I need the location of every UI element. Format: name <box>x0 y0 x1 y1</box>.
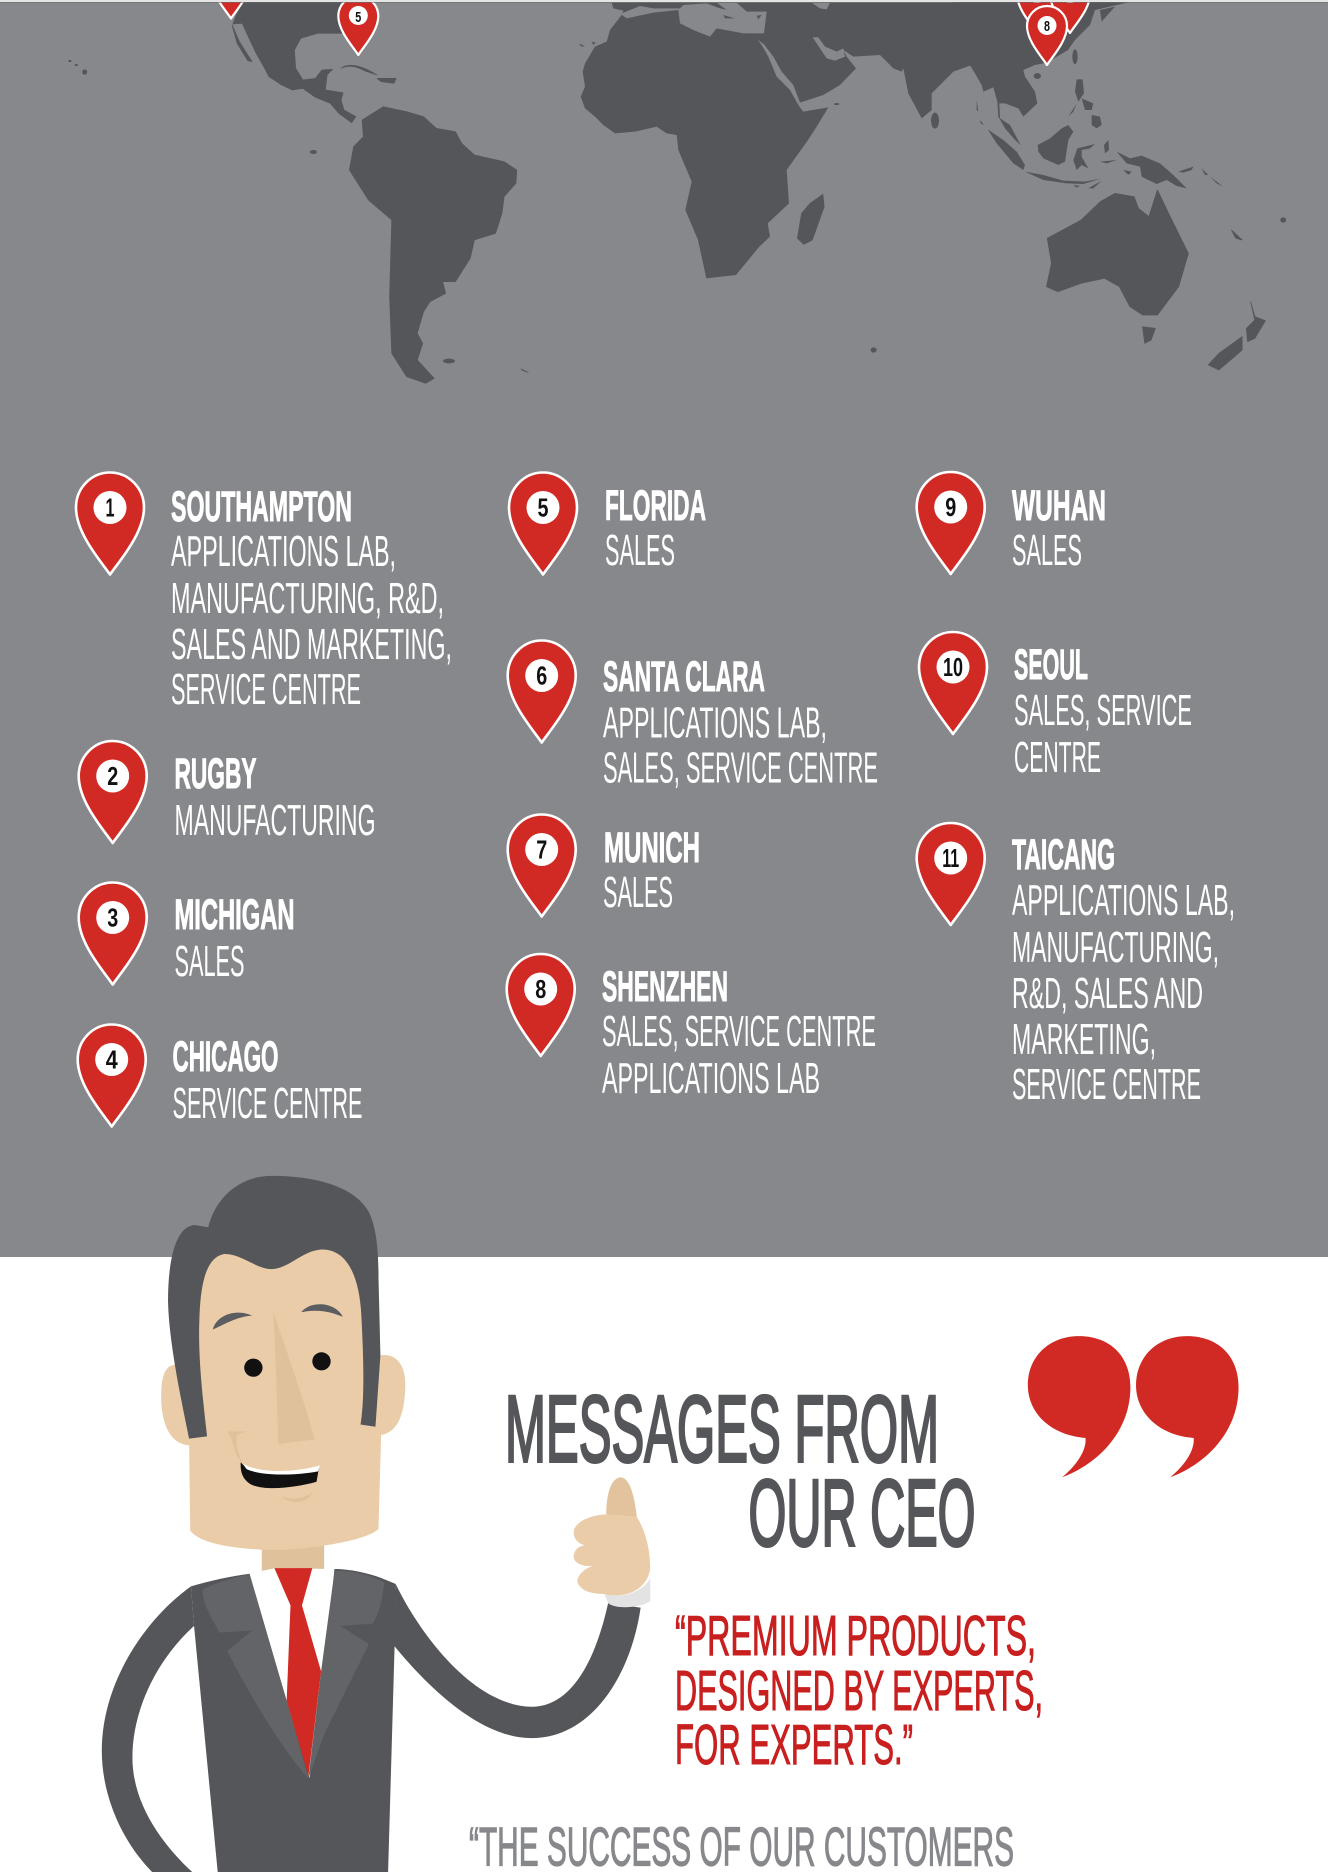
text: Munich: SALES <box>603 869 673 917</box>
map: East and Southeast Asia <box>953 2 1223 188</box>
map pin behind left <box>1017 0 1057 33</box>
text: Santa Clara: SANTA CLARA <box>603 653 765 701</box>
red pull quote <box>675 1604 1043 1777</box>
lapels <box>202 1571 384 1778</box>
text: Southampton: MANUFACTURING, R&D, <box>171 575 444 623</box>
text: Southampton: SOUTHAMPTON <box>171 483 352 531</box>
map pin: Chicago area <box>211 0 251 18</box>
pin 2: 2 <box>107 761 118 791</box>
text: Michigan: SALES <box>174 938 244 986</box>
text: Florida: FLORIDA <box>605 482 706 530</box>
eyebrows <box>213 1304 343 1330</box>
ears <box>161 1355 405 1445</box>
pin 1: 1 <box>106 492 114 522</box>
heading: messages from our CEO <box>505 1376 976 1566</box>
pin 6 <box>508 640 576 742</box>
thumbs-up hand <box>574 1477 650 1595</box>
location 1: Southampton <box>76 472 452 714</box>
icon: large quotation marks <box>1028 1336 1239 1477</box>
Mediterranean Sea <box>621 3 767 37</box>
text: Florida <box>605 482 706 575</box>
shirt <box>250 1568 334 1778</box>
pin 8 <box>507 954 575 1056</box>
pin 7: 7 <box>536 834 547 864</box>
text: Taicang <box>1012 831 1235 1109</box>
text: Taicang: TAICANG <box>1012 831 1115 879</box>
neck <box>262 1544 324 1571</box>
map pin 5: Florida: 5 <box>355 9 361 26</box>
text: Seoul <box>1014 641 1192 782</box>
pin 6: 6 <box>536 660 547 690</box>
text: Shenzhen <box>602 963 876 1103</box>
pin 4: 4 <box>106 1044 118 1074</box>
pin 5: 5 <box>538 492 548 522</box>
text: Munich: MUNICH <box>604 824 700 872</box>
heading: messages from our CEO: OUR CEO <box>748 1460 976 1566</box>
map: Africa south islands, Australia, New Zealand <box>797 190 1286 370</box>
pin 3: 3 <box>107 902 118 932</box>
text: Southampton: APPLICATIONS LAB, <box>171 528 396 576</box>
pin 9: 9 <box>945 492 956 522</box>
Caspian Sea <box>812 3 830 9</box>
text: Rugby <box>174 750 376 845</box>
text: Michigan: MICHIGAN <box>174 891 294 939</box>
text: Wuhan: SALES <box>1012 527 1082 575</box>
location 5: Florida <box>509 472 706 575</box>
text: Santa Clara <box>603 653 878 792</box>
text: Shenzhen: SHENZHEN <box>602 963 728 1011</box>
location 3: Michigan <box>79 882 294 986</box>
mouth <box>241 1462 320 1488</box>
text: Shenzhen: APPLICATIONS LAB <box>602 1055 820 1103</box>
jacket <box>191 1569 396 1872</box>
text: Florida: SALES <box>605 527 675 575</box>
text: Santa Clara: APPLICATIONS LAB, <box>603 700 827 748</box>
location list: column 3 <box>917 472 1235 1109</box>
pin 11: 11 <box>942 843 959 873</box>
pin 7 <box>508 814 576 916</box>
location list: column 1 <box>76 472 452 1128</box>
location 10: Seoul <box>919 632 1192 782</box>
text: Rugby: RUGBY <box>174 750 256 798</box>
hair <box>168 1176 380 1439</box>
map pin 8: Shenzhen <box>1027 6 1067 65</box>
pin 9 <box>917 472 985 574</box>
pin 2 <box>79 741 147 843</box>
pin 10 <box>919 632 987 734</box>
text: Munich <box>603 824 700 917</box>
map: Americas <box>69 2 528 383</box>
pin 4 <box>78 1024 146 1126</box>
pin 1 <box>76 472 144 574</box>
text: Michigan <box>174 891 294 986</box>
tie <box>274 1568 321 1776</box>
face <box>189 1237 381 1550</box>
red pull quote: “PREMIUM PRODUCTS, <box>675 1604 1036 1668</box>
location 6: Santa Clara <box>508 640 878 792</box>
Persian Gulf <box>813 37 845 61</box>
eyes <box>244 1352 331 1377</box>
location 4: Chicago <box>78 1024 362 1128</box>
text: Wuhan <box>1012 482 1106 575</box>
text: Seoul: CENTRE <box>1014 734 1101 782</box>
world map <box>69 2 1286 383</box>
location 11: Taicang <box>917 823 1235 1109</box>
location 2: Rugby <box>79 741 375 845</box>
smile shading <box>227 1431 312 1502</box>
text: Wuhan: WUHAN <box>1012 482 1106 530</box>
location 8: Shenzhen <box>507 954 876 1103</box>
map pin 5: Florida <box>338 0 378 55</box>
text: Seoul: SEOUL <box>1014 641 1088 689</box>
text: Chicago <box>172 1033 362 1128</box>
CEO character illustration <box>102 1176 650 1872</box>
location list: column 2 <box>507 472 878 1103</box>
left arm <box>102 1586 194 1872</box>
grey map background panel <box>0 0 1328 1257</box>
pin 8: 8 <box>535 974 546 1004</box>
red pull quote: FOR EXPERTS.” <box>675 1713 913 1777</box>
text: Southampton: SALES AND MARKETING, <box>171 621 452 669</box>
pin 3 <box>79 882 147 984</box>
nose <box>273 1312 315 1444</box>
top edge strip <box>0 0 1328 3</box>
text: Southampton: SERVICE CENTRE <box>171 666 361 714</box>
pin 11 <box>917 823 985 925</box>
text: Santa Clara: SALES, SERVICE CENTRE <box>603 744 878 792</box>
text: Taicang: MARKETING, <box>1012 1016 1156 1064</box>
location 7: Munich <box>508 814 700 917</box>
shirt cuff <box>604 1578 650 1607</box>
location 9: Wuhan <box>917 472 1106 575</box>
location list: column 1: SERVICE CENTRE <box>172 1080 362 1128</box>
text: Shenzhen: SALES, SERVICE CENTRE <box>602 1008 876 1056</box>
map: Africa, Middle East, South Asia <box>578 3 988 278</box>
text: Southampton <box>171 483 452 714</box>
text: Chicago: CHICAGO <box>172 1033 278 1081</box>
pin 5 <box>509 472 577 574</box>
map pin behind right <box>1050 0 1090 33</box>
heading: messages from our CEO: MESSAGES FROM <box>505 1376 939 1482</box>
pin 10: 10 <box>943 652 963 682</box>
right arm <box>394 1584 641 1738</box>
text: Rugby: MANUFACTURING <box>174 797 376 845</box>
map pins clipped at top <box>211 0 1090 65</box>
map pin 8: Shenzhen: 8 <box>1044 18 1050 35</box>
